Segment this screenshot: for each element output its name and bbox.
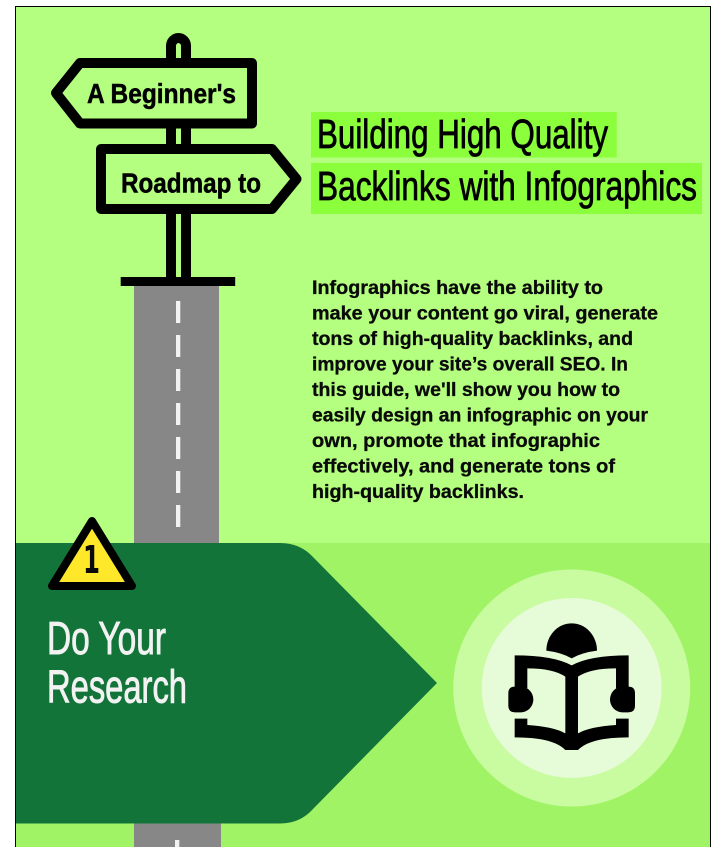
icon: reader in circles <box>453 570 690 806</box>
icon: person reading a book <box>508 623 635 750</box>
step 1 arrow panel <box>16 543 437 824</box>
intro text block: effectively, and generate tons of <box>312 456 616 478</box>
title <box>311 111 702 214</box>
signpost <box>56 38 296 286</box>
step 1 heading: Do Your <box>47 612 166 664</box>
intro text block <box>312 278 658 503</box>
sign: Roadmap to <box>101 149 296 209</box>
warning triangle with number 1: 1 <box>83 538 100 582</box>
signpost pole <box>171 38 186 280</box>
title line 1: Building High Quality <box>317 111 608 157</box>
sign: Roadmap to: Roadmap to <box>121 168 261 198</box>
sign: A Beginner's: A Beginner's <box>87 78 236 109</box>
signpost base <box>121 277 235 286</box>
intro text block: make your content go viral, generate <box>312 304 658 324</box>
intro text block: own, promote that infographic <box>312 431 600 452</box>
intro text block: high-quality backlinks. <box>312 482 524 503</box>
intro text block: improve your site’s overall SEO. In <box>312 354 628 376</box>
intro text block: tons of high-quality backlinks, and <box>312 329 633 350</box>
road: upper section <box>134 286 219 543</box>
road: lower section <box>134 823 221 847</box>
intro text block: Infographics have the ability to <box>312 278 603 299</box>
step 1 heading <box>47 612 187 712</box>
intro text block: this guide, we'll show you how to <box>312 380 620 401</box>
warning triangle with number 1 <box>52 521 132 586</box>
step 1 heading: Research <box>47 660 187 712</box>
sign: A Beginner's <box>56 63 252 124</box>
intro text block: easily design an infographic on your <box>312 406 649 426</box>
